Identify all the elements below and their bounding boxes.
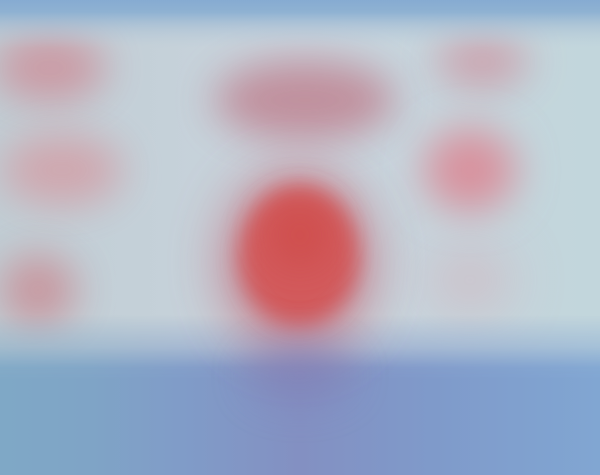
panel: bottom left block [0,254,76,326]
panel: top centre block [215,60,395,140]
panel: middle left block [2,134,122,206]
panel: top right block [436,36,528,88]
header band [0,0,600,48]
panel: middle right block [424,128,516,212]
central circle highlight [270,201,330,269]
footer band [0,315,600,475]
panel: bottom right block [430,252,510,308]
central red circle [241,188,357,324]
panel: top left block [0,34,106,102]
footer shadow below circle [250,349,350,401]
central circle halo [226,174,370,350]
